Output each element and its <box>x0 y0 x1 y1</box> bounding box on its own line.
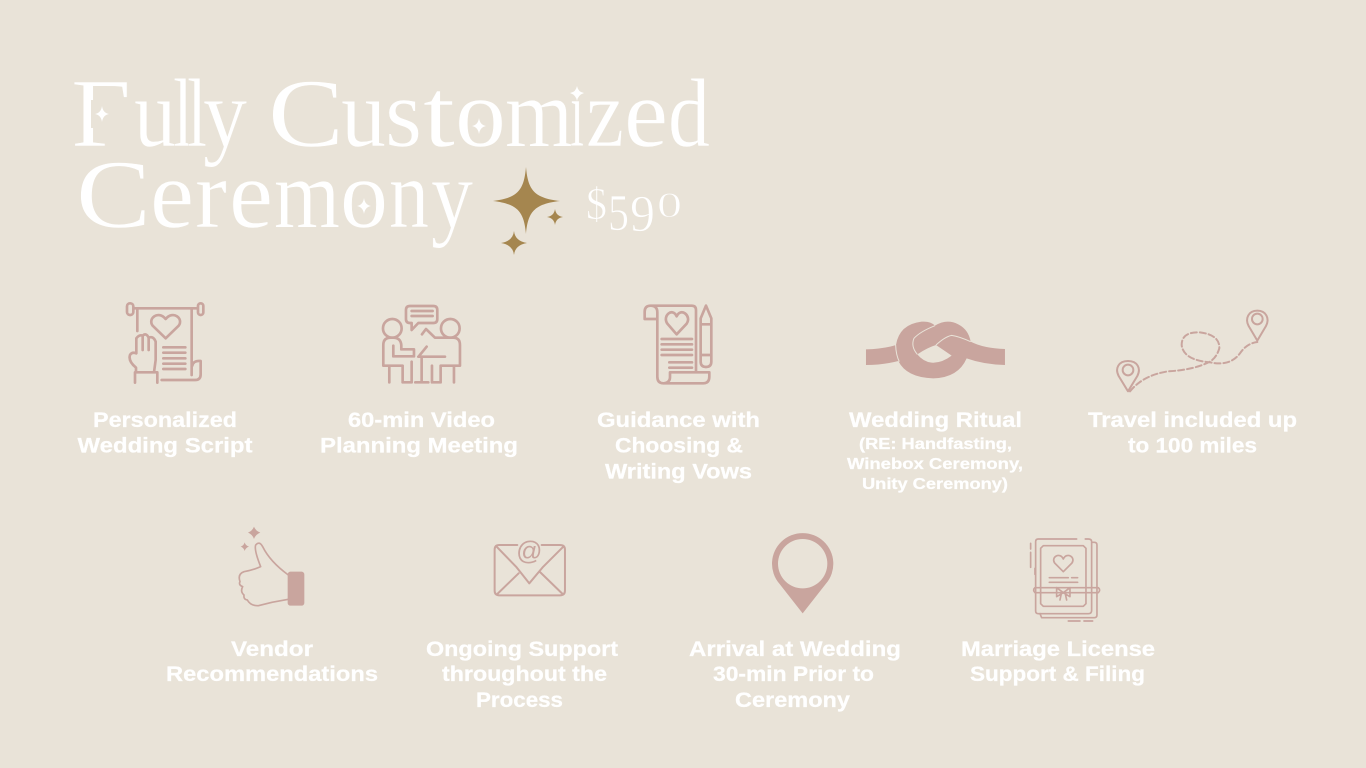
label <box>426 638 618 712</box>
label: Recommendations <box>166 663 378 686</box>
feature: Travel <box>1088 311 1297 458</box>
title <box>71 60 710 249</box>
title: z <box>586 60 624 168</box>
label <box>78 409 252 458</box>
feature: Marriage License <box>961 539 1155 686</box>
title: e <box>229 141 273 249</box>
label: Planning Meeting <box>320 434 518 458</box>
icon: route between two pins <box>1117 311 1268 391</box>
label: Ongoing Support <box>426 638 618 661</box>
label: Guidance with <box>597 409 760 432</box>
title: m <box>505 60 573 168</box>
label: Winebox Ceremony, <box>847 456 1023 473</box>
label: Marriage License <box>961 638 1155 661</box>
title: l <box>187 60 207 168</box>
label: 60-min Video <box>348 409 495 432</box>
label <box>166 638 378 686</box>
icon: envelope with at sign: @ <box>516 536 542 566</box>
title: l <box>173 60 193 168</box>
title: u <box>341 60 386 168</box>
label: Process <box>476 689 563 712</box>
title: C <box>268 60 344 168</box>
icon: scroll with raised hand <box>127 303 203 383</box>
icon: envelope with at sign <box>495 536 565 595</box>
label <box>320 409 518 458</box>
title: y <box>431 141 473 249</box>
label: Support & Filing <box>970 663 1145 686</box>
feature: Guidance with Vows <box>597 306 760 484</box>
label: Wedding Ritual <box>849 409 1022 432</box>
icon: certificate with bow <box>1031 539 1100 621</box>
price: 0 <box>657 185 682 225</box>
feature: Video Planning Meeting <box>320 306 518 458</box>
feature: Personalized Wedding Script <box>78 303 252 458</box>
label: Wedding Script <box>78 434 252 458</box>
title: m <box>274 141 340 249</box>
title: o <box>455 60 506 168</box>
feature: Vendor Recommendations <box>166 527 378 686</box>
label <box>1088 409 1297 458</box>
label: Choosing & <box>615 434 743 458</box>
price: 9 <box>630 186 655 243</box>
feature: Wedding Ritual <box>847 322 1023 493</box>
price: 5 <box>608 185 629 242</box>
label: Vendor <box>231 638 313 661</box>
title: d <box>668 60 710 168</box>
title: r <box>195 141 227 249</box>
label: Travel included up <box>1088 409 1297 432</box>
icon: knot <box>866 322 1005 378</box>
label <box>847 409 1023 493</box>
title: e <box>150 141 194 249</box>
label <box>597 409 760 484</box>
label: Personalized <box>93 409 237 432</box>
label: Ceremony <box>735 689 850 712</box>
title: y <box>203 60 247 168</box>
label: Unity Ceremony) <box>862 476 1008 493</box>
title: F <box>71 60 131 168</box>
price: $ <box>586 178 607 229</box>
label: to 100 miles <box>1128 434 1257 458</box>
label: (RE: Handfasting, <box>859 436 1012 453</box>
feature: Ongoing Support <box>426 536 618 712</box>
title: u <box>134 60 176 168</box>
icon: two people meeting <box>383 306 460 382</box>
feature: Arrival at Wedding <box>689 533 901 712</box>
icon: scroll with heart and pencil <box>645 306 711 383</box>
label: Arrival at Wedding <box>689 638 901 661</box>
label: throughout the <box>442 663 607 686</box>
title: t <box>423 60 455 168</box>
icon: gold sparkles <box>493 167 563 255</box>
label <box>961 638 1155 686</box>
icon: thumbs up <box>239 527 304 606</box>
title: o <box>340 141 388 249</box>
title: e <box>624 60 668 168</box>
label: Writing Vows <box>605 460 752 484</box>
label: 30-min Prior to <box>713 663 874 686</box>
label <box>689 638 901 712</box>
title: s <box>385 60 422 168</box>
title: i <box>570 60 584 168</box>
title: n <box>389 141 429 249</box>
icon: map pin <box>772 533 833 613</box>
title: C <box>76 141 151 249</box>
